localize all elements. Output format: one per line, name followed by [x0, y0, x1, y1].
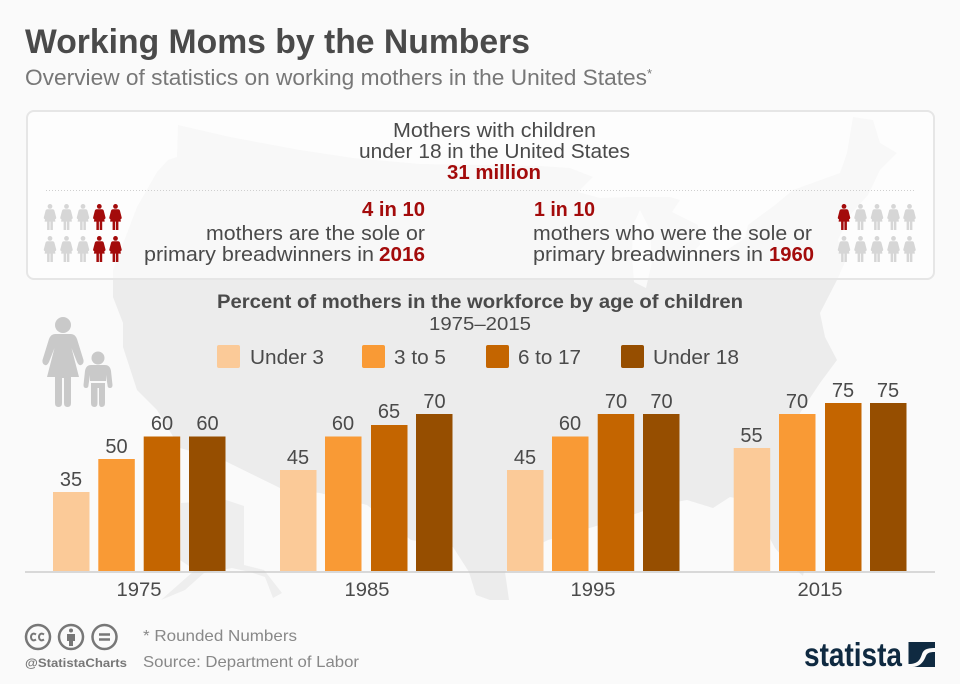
footnote and source: Source: Department of Labor — [143, 654, 360, 671]
statistic: 1 in 10 in 1960 — [533, 199, 814, 266]
subtitle: Overview of statistics on working mothers in the United States — [25, 65, 647, 90]
footnote and source: * Rounded Numbers — [143, 628, 297, 645]
group: 2015: 2015 — [798, 580, 842, 601]
chart heading — [217, 292, 743, 334]
title: Working Moms by the Numbers — [25, 23, 530, 61]
icons: 4 in 10 mothers — [44, 204, 122, 262]
panel: mothers statistics — [27, 111, 934, 279]
statistic: 4 in 10 in 2016 — [144, 199, 425, 266]
group: 1975 — [53, 413, 226, 601]
group: 1995: 70 — [650, 391, 673, 413]
legend item: 6 to 17: 6 to 17 — [518, 347, 581, 369]
group: 1995: 60 — [559, 413, 581, 435]
statistic: 4 in 10 in 2016: primary breadwinners in — [144, 244, 374, 266]
group: 1975: 60 — [196, 413, 219, 435]
group: 1985: 1985 — [344, 580, 390, 601]
group: 1975: 50 — [105, 436, 128, 458]
icons: creative commons licence — [26, 625, 116, 649]
chart legend — [217, 345, 739, 369]
statistic: 1 in 10 in 1960: mothers who were the sole or — [533, 223, 812, 245]
group: 1995: 1995 — [570, 580, 616, 601]
group: 1985: 60 — [332, 413, 354, 435]
legend item: Under 18: Under 18 — [653, 347, 739, 369]
legend item: Under 3: Under 3 — [250, 347, 324, 369]
group: 1995 — [507, 391, 680, 601]
statista logo: statista — [804, 636, 903, 673]
chart heading: 1975–2015 — [429, 314, 531, 334]
legend item: Under 3 — [217, 345, 324, 369]
total mothers statistic: Mothers with children — [393, 120, 596, 142]
total mothers statistic: 31 million — [447, 162, 541, 184]
icon: mother and child — [42, 317, 112, 407]
group: 1985: 45 — [287, 447, 309, 469]
group: 1985: 65 — [378, 401, 400, 423]
subtitle: * — [647, 66, 652, 81]
group: 1975: 1975 — [116, 580, 162, 601]
bar chart — [25, 380, 935, 601]
statistic: 4 in 10 in 2016: 2016 — [379, 244, 425, 266]
statistic: 1 in 10 in 1960: 1 in 10 — [534, 199, 595, 221]
background map of the United States — [113, 117, 897, 600]
chart heading: Percent of mothers in the workforce by age of children — [217, 292, 743, 313]
footnote and source — [143, 628, 360, 671]
group: 2015: 75 — [877, 380, 899, 402]
group: 1985 — [280, 391, 452, 601]
legend item: 3 to 5 — [362, 345, 446, 369]
total mothers statistic: under 18 in the United States — [359, 141, 630, 163]
legend item: 3 to 5: 3 to 5 — [394, 347, 446, 369]
group: 1975: 35 — [60, 469, 82, 491]
group: 2015: 75 — [832, 380, 854, 402]
group: 2015: 70 — [786, 391, 808, 413]
group: 1995: 70 — [605, 391, 627, 413]
group: 1985: 70 — [423, 391, 446, 413]
group: 2015: 55 — [740, 425, 763, 447]
statistic: 4 in 10 in 2016: 4 in 10 — [362, 199, 425, 221]
group: 1975: 60 — [151, 413, 173, 435]
legend item: Under 18 — [621, 345, 739, 369]
social handle: @StatistaCharts — [25, 656, 127, 670]
total mothers statistic — [359, 120, 630, 184]
icons: 1 in 10 mothers — [838, 204, 916, 262]
statistic: 4 in 10 in 2016: mothers are the sole or — [206, 223, 425, 245]
legend item: 6 to 17 — [486, 345, 581, 369]
group: 2015 — [734, 380, 906, 601]
statistic: 1 in 10 in 1960: primary breadwinners in — [533, 244, 763, 266]
statistic: 1 in 10 in 1960: 1960 — [769, 244, 814, 266]
group: 1995: 45 — [514, 447, 536, 469]
